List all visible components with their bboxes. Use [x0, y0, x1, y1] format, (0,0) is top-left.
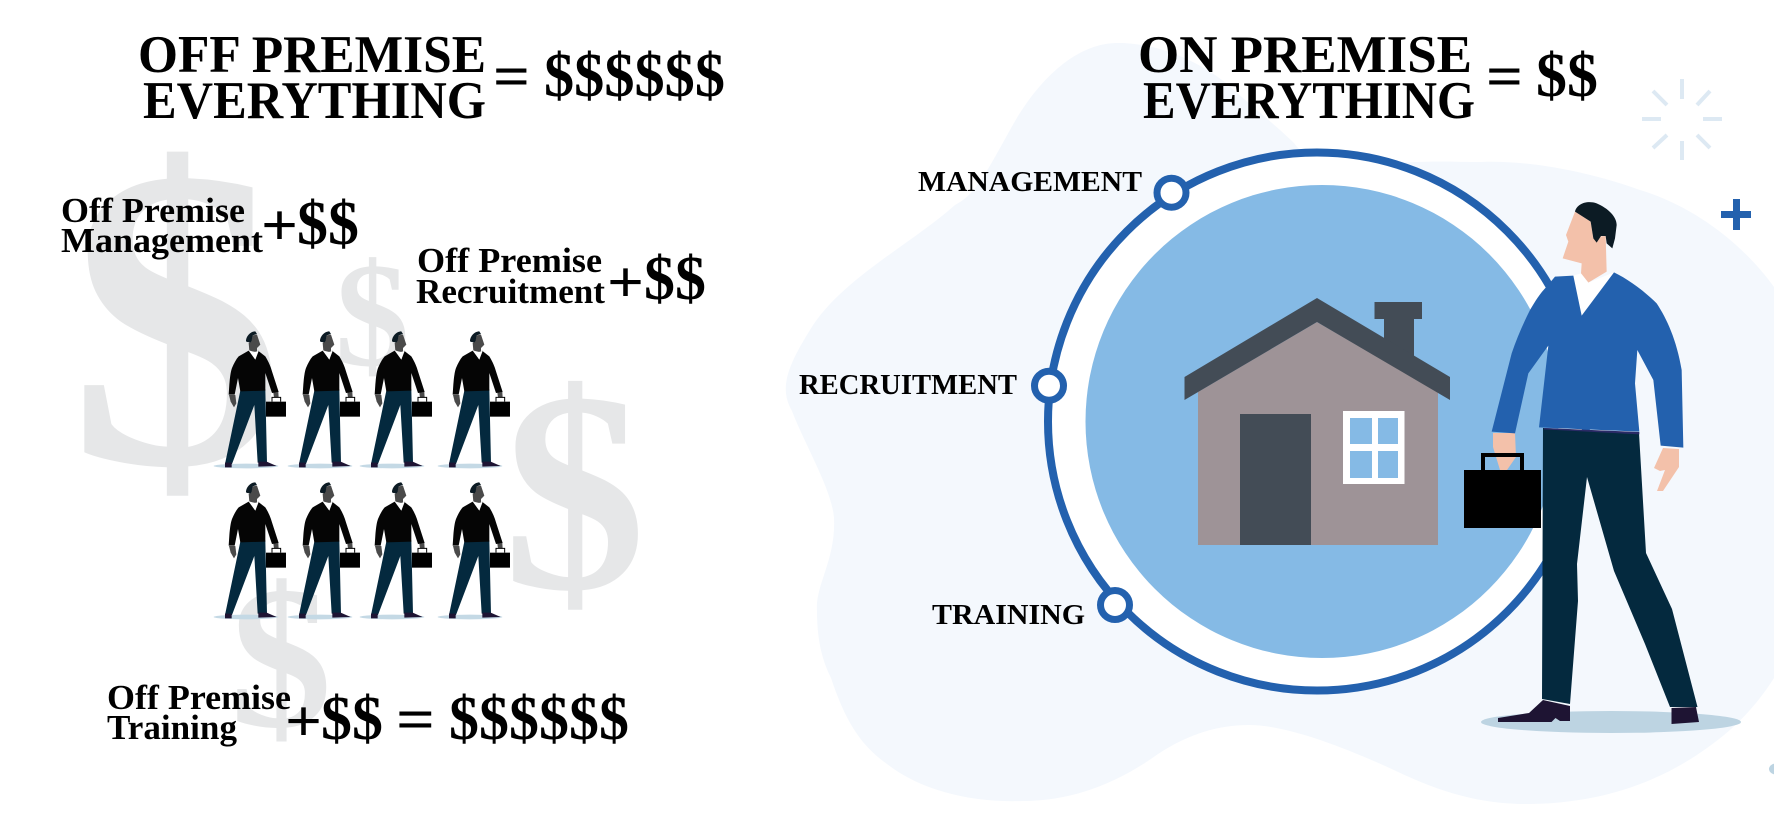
label: off premise training total: [107, 678, 629, 754]
label: off premise management cost: $$: [297, 190, 359, 258]
label: off premise management cost: Management: [61, 221, 263, 260]
heading: off premise everything: EVERYTHING: [143, 72, 486, 130]
heading: off premise everything: =: [493, 43, 530, 109]
heading: off premise everything: OFF PREMISE: [138, 26, 486, 84]
label: off premise recruitment cost: $$: [644, 245, 706, 313]
figure: businessman with briefcase: [1464, 202, 1741, 733]
node: management: [1157, 178, 1186, 207]
node: training: [1100, 590, 1130, 620]
label: management: MANAGEMENT: [918, 166, 1142, 198]
background dollar signs: $: [503, 333, 646, 650]
label: off premise recruitment cost: [416, 241, 706, 315]
node: recruitment: [1034, 371, 1064, 400]
heading: on premise everything: $$: [1536, 42, 1598, 110]
icon: plus: [1721, 199, 1751, 230]
label: off premise recruitment cost: +: [607, 249, 644, 315]
icon: house: [1184, 298, 1450, 545]
label: off premise training total: $$$$$$: [449, 685, 629, 753]
group of off premise workers: [214, 331, 510, 619]
background dollar signs: $: [335, 233, 410, 398]
briefcase: [1464, 455, 1541, 528]
label: off premise training total: Training: [107, 708, 237, 747]
label: off premise recruitment cost: Recruitment: [416, 272, 605, 311]
label: off premise management cost: [61, 190, 359, 260]
man's upper body: [1492, 202, 1683, 448]
background blob: [786, 43, 1774, 804]
label: training: TRAINING: [932, 599, 1085, 631]
label: off premise recruitment cost: Off Premise: [417, 241, 602, 280]
heading: off premise everything: [138, 26, 725, 130]
label: off premise training total: =: [396, 686, 435, 752]
label: recruitment: RECRUITMENT: [799, 369, 1017, 401]
background dollar signs: $: [69, 81, 284, 557]
label: off premise management cost: +: [261, 192, 298, 258]
label: off premise management cost: Off Premise: [61, 191, 245, 230]
ring around house: [1048, 152, 1586, 690]
label: off premise training total: Off Premise: [107, 678, 291, 717]
light blue disc: [1086, 185, 1558, 658]
background dollar signs: [69, 81, 646, 771]
heading: on premise everything: [1138, 26, 1598, 130]
partial shadow at edge: [1769, 763, 1774, 775]
background dollar signs: $: [230, 545, 332, 771]
man's hands: [1493, 433, 1679, 491]
label: off premise training total: +: [285, 688, 322, 754]
heading: on premise everything: ON PREMISE: [1138, 26, 1472, 84]
heading: on premise everything: =: [1486, 43, 1523, 109]
heading: off premise everything: $$$$$$: [544, 42, 725, 110]
man's shoes: [1498, 700, 1699, 724]
man's ground shadow: [1481, 711, 1741, 733]
icon: sparkle: [1642, 79, 1722, 160]
heading: on premise everything: EVERYTHING: [1143, 72, 1475, 130]
man's trousers: [1542, 428, 1698, 707]
label: off premise training total: $$: [321, 685, 383, 753]
